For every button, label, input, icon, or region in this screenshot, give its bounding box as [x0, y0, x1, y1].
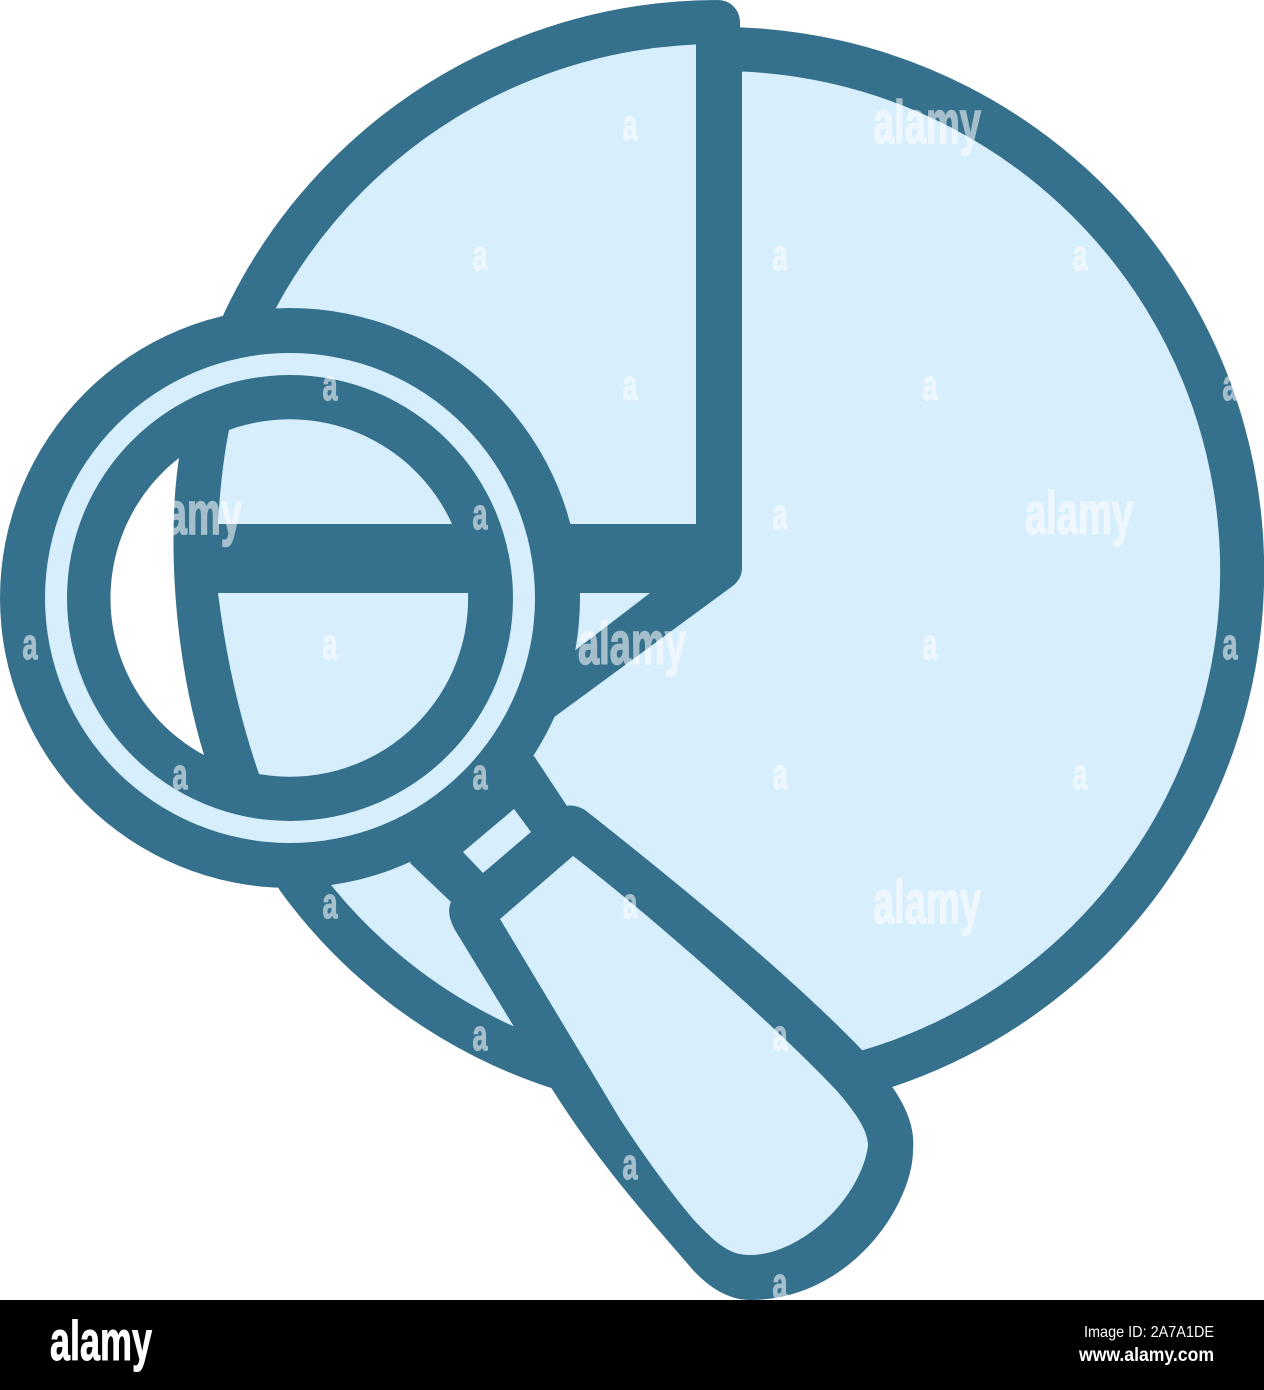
- stock watermarks: a: [622, 879, 638, 928]
- stock watermarks: a: [472, 490, 488, 539]
- magnified slice area: [218, 419, 452, 524]
- magnified main pie area: [218, 593, 468, 777]
- stock watermarks: a: [922, 361, 938, 410]
- pie chart main segment: [298, 49, 1242, 1093]
- stock watermarks: a: [1222, 620, 1238, 669]
- stock watermarks: a: [322, 879, 338, 928]
- stock watermarks: a: [622, 1140, 638, 1189]
- stock watermarks: alamy: [134, 480, 242, 547]
- stock watermarks: a: [472, 231, 488, 280]
- stock watermarks: a: [22, 620, 38, 669]
- image id: Image ID: 2A7A1DE: [1084, 1324, 1214, 1341]
- stock watermarks: a: [472, 750, 488, 799]
- handle grip fill: [500, 856, 868, 1255]
- stock watermarks: alamy: [578, 610, 686, 677]
- stock watermarks: alamy: [1025, 480, 1133, 547]
- stock watermarks: a: [472, 1011, 488, 1060]
- stock watermarks: a: [922, 620, 938, 669]
- pie chart detached quarter slice: [194, 22, 718, 546]
- stock watermarks: a: [1222, 361, 1238, 410]
- stock watermarks: a: [1072, 750, 1088, 799]
- gap triangle between pie segments: [560, 593, 650, 662]
- footer bar: [0, 1300, 1264, 1390]
- magnifier handle: [410, 756, 913, 1300]
- stock watermarks: a: [922, 1140, 938, 1189]
- lens light ring: [45, 353, 535, 843]
- stock watermarks: a: [322, 620, 338, 669]
- footer logo: alamy: [50, 1309, 152, 1372]
- website: www.alamy.com: [1078, 1345, 1214, 1366]
- stock watermarks: a: [772, 1011, 788, 1060]
- handle outline: [449, 806, 913, 1300]
- stock watermarks: a: [622, 101, 638, 150]
- stock watermarks: a: [322, 361, 338, 410]
- handle neck: [410, 756, 590, 925]
- stock watermarks: a: [1072, 1011, 1088, 1060]
- footer background: [0, 1300, 1264, 1390]
- stock watermarks: alamy: [873, 869, 981, 936]
- lens outer ring: [0, 308, 580, 888]
- pie centre junction band: [500, 560, 740, 720]
- lens inner ring: [67, 375, 513, 821]
- stock watermarks: a: [172, 750, 188, 799]
- stock watermarks: a: [772, 750, 788, 799]
- stock watermarks: a: [772, 490, 788, 539]
- neck highlight: [463, 809, 531, 873]
- white crescent inside lens: [110, 458, 204, 755]
- stock watermarks: alamy: [873, 89, 981, 156]
- stock watermarks: a: [622, 361, 638, 410]
- magnifier lens: [0, 308, 580, 888]
- stock watermarks: a: [772, 1259, 788, 1308]
- stock watermarks: a: [1072, 231, 1088, 280]
- stock watermarks: a: [772, 231, 788, 280]
